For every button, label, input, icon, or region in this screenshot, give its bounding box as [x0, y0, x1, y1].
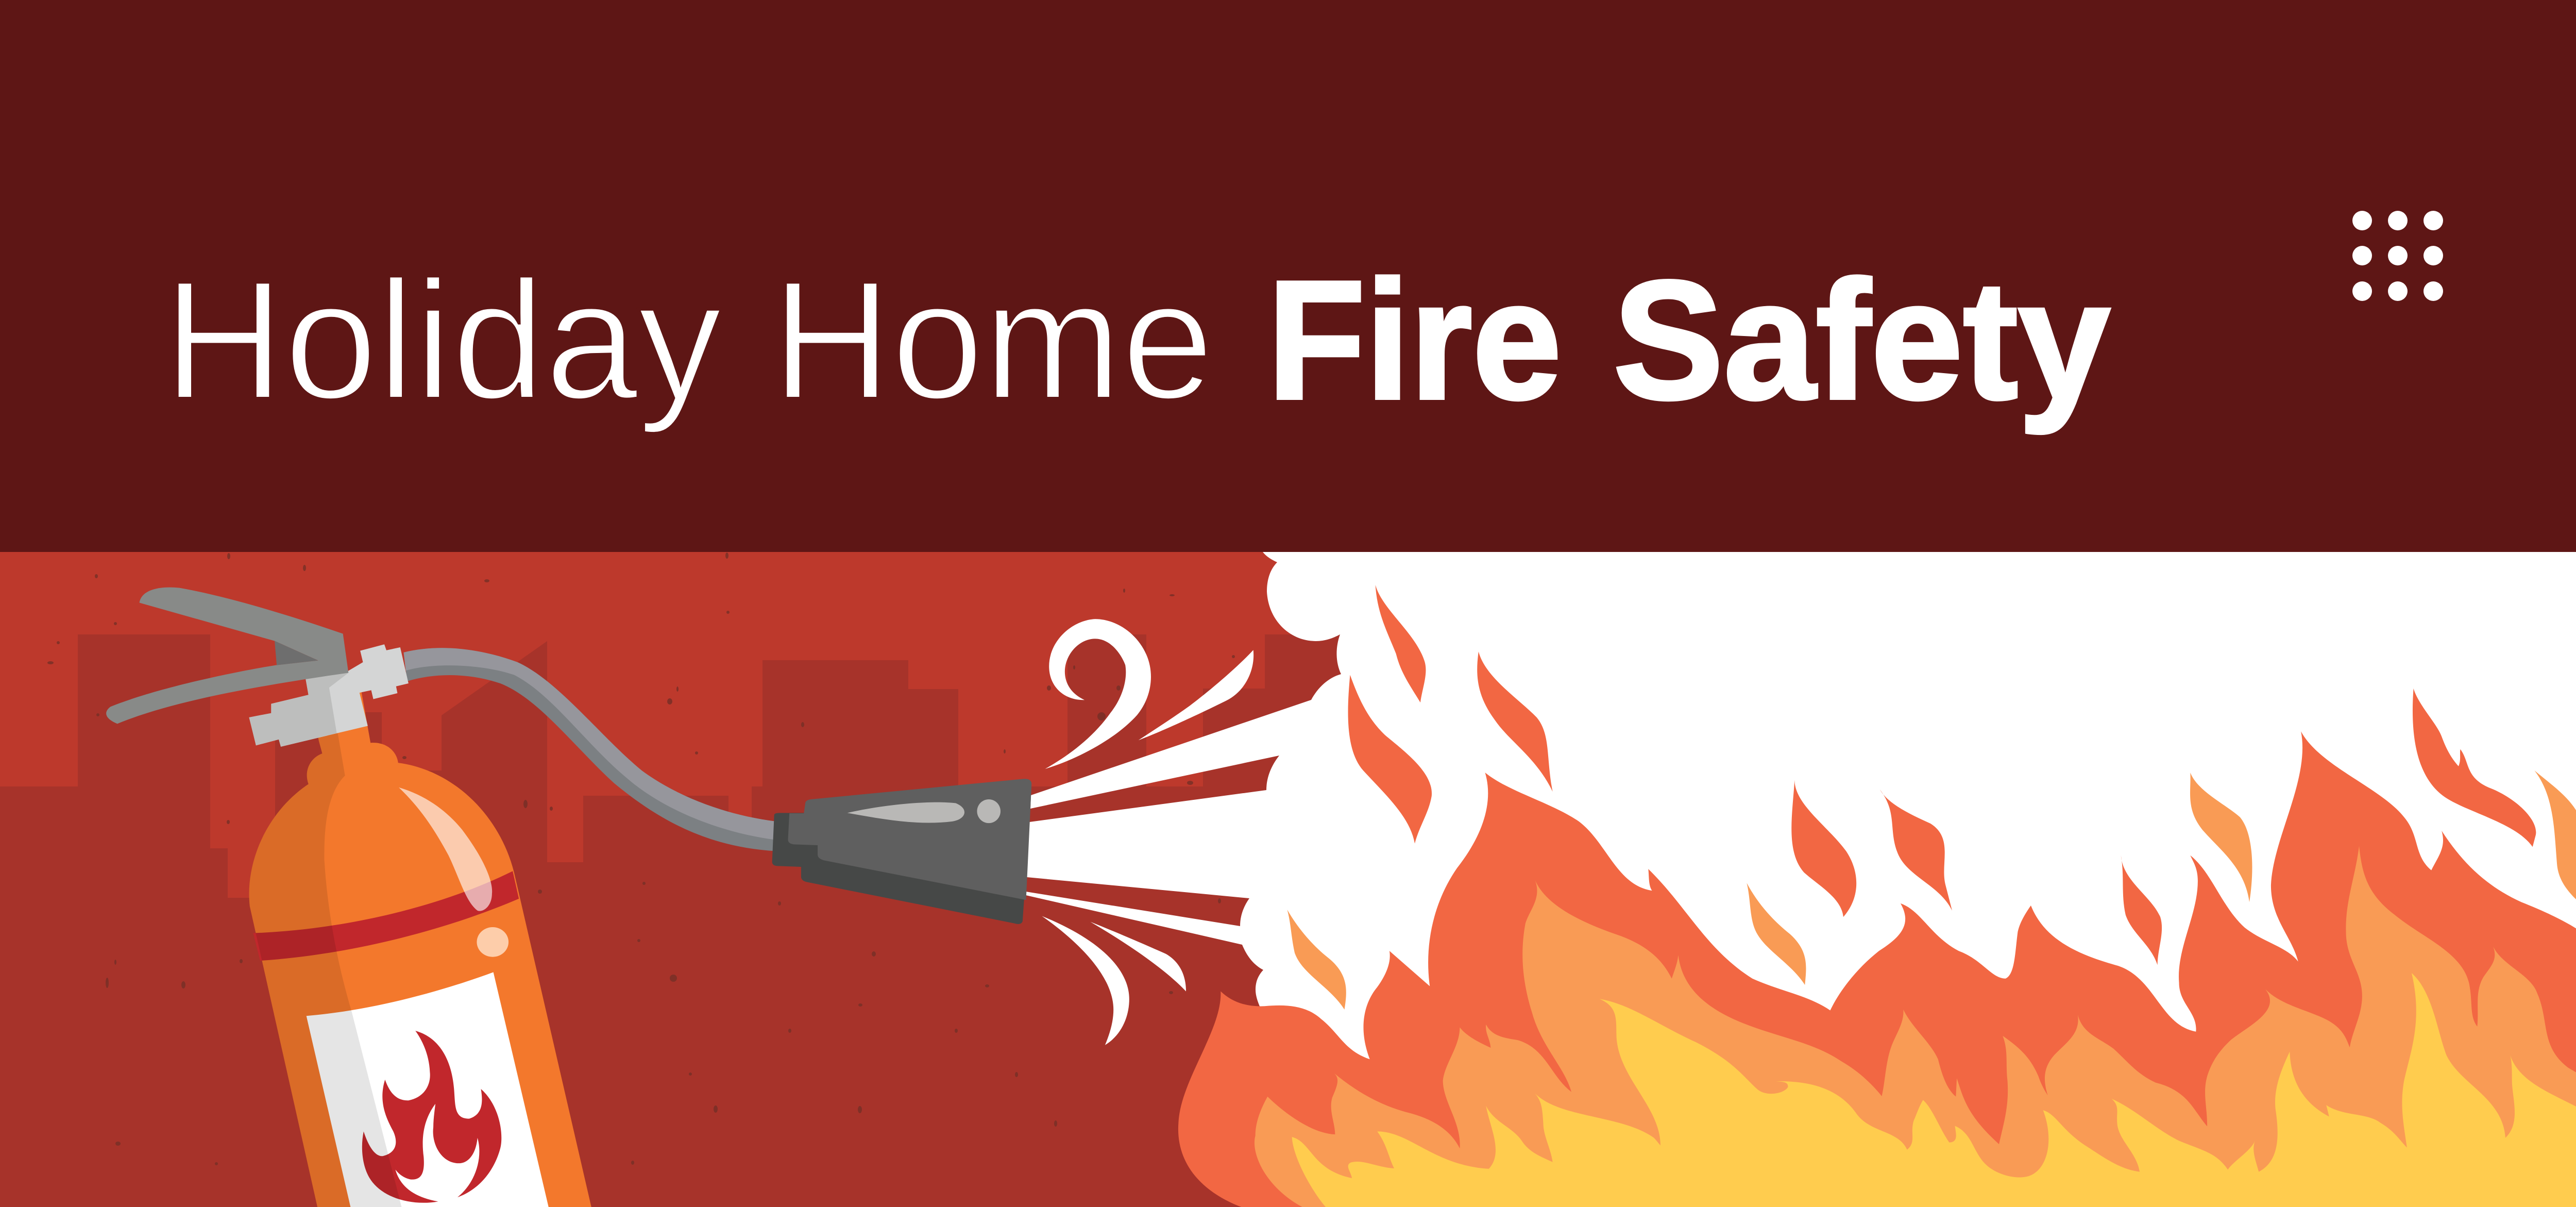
title: Holiday [163, 245, 722, 435]
red band [253, 871, 519, 961]
valve collar shade [249, 673, 348, 747]
valve collar [249, 644, 409, 747]
dust specks [47, 552, 1235, 1165]
highlight on cylinder [399, 787, 492, 911]
detached orange flame licks [1287, 770, 2576, 1010]
water spray and smoke cloud [1026, 552, 2576, 1072]
hose [403, 648, 776, 851]
white label [307, 972, 549, 1207]
icon: label flame [362, 1031, 501, 1203]
fire extinguisher [106, 588, 1031, 1207]
flame layer: inner yellow [1292, 973, 2576, 1207]
flame layer: outer red-orange [1178, 731, 2576, 1207]
icon: dot grid logo [2352, 211, 2443, 301]
flame layer: middle orange [1255, 846, 2576, 1207]
water curls upper [1045, 619, 1253, 769]
panel: scene background [0, 552, 1391, 1207]
title: Safety [1613, 245, 2111, 435]
cylinder body [249, 677, 591, 1207]
handle shadow [275, 641, 318, 665]
title [163, 245, 2111, 435]
cylinder shaded side [249, 711, 401, 1207]
title: Fire [1267, 245, 1562, 434]
handle levers [106, 588, 348, 724]
water curls lower [1042, 916, 1186, 1045]
panel: top header band [0, 0, 2576, 552]
nozzle [772, 779, 1031, 924]
title: Home [772, 245, 1214, 434]
city skyline silhouette [0, 634, 1391, 1207]
detached red-orange flame licks [1348, 585, 2536, 965]
gauge dot [477, 927, 509, 957]
flames [1178, 585, 2576, 1207]
